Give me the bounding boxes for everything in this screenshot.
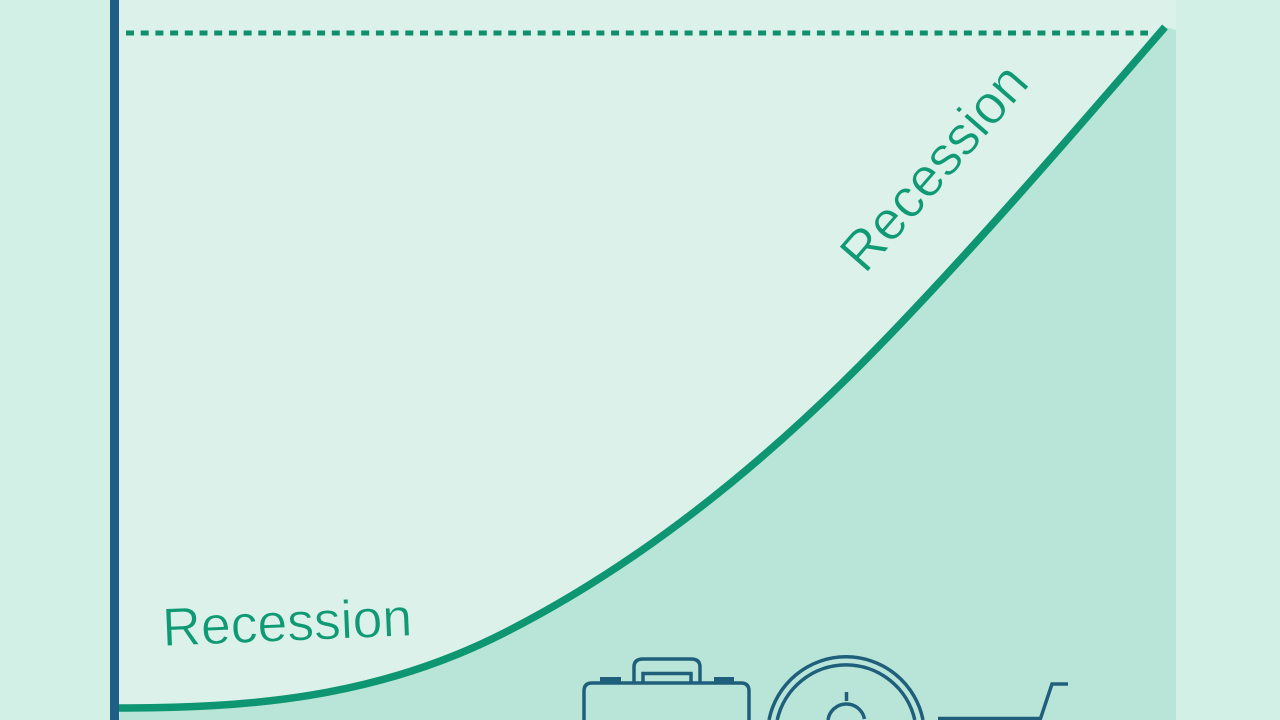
- icon: scale with coin: [769, 657, 923, 720]
- growth curve: [119, 27, 1165, 708]
- dotted peak line: [126, 30, 1148, 36]
- area under curve: [119, 27, 1176, 720]
- icon: briefcase: [584, 659, 749, 720]
- label: upper recession: Recession: [827, 51, 1040, 283]
- label: lower recession: Recession: [161, 588, 413, 658]
- icon: shopping cart: [938, 684, 1068, 720]
- vertical axis: [110, 0, 119, 720]
